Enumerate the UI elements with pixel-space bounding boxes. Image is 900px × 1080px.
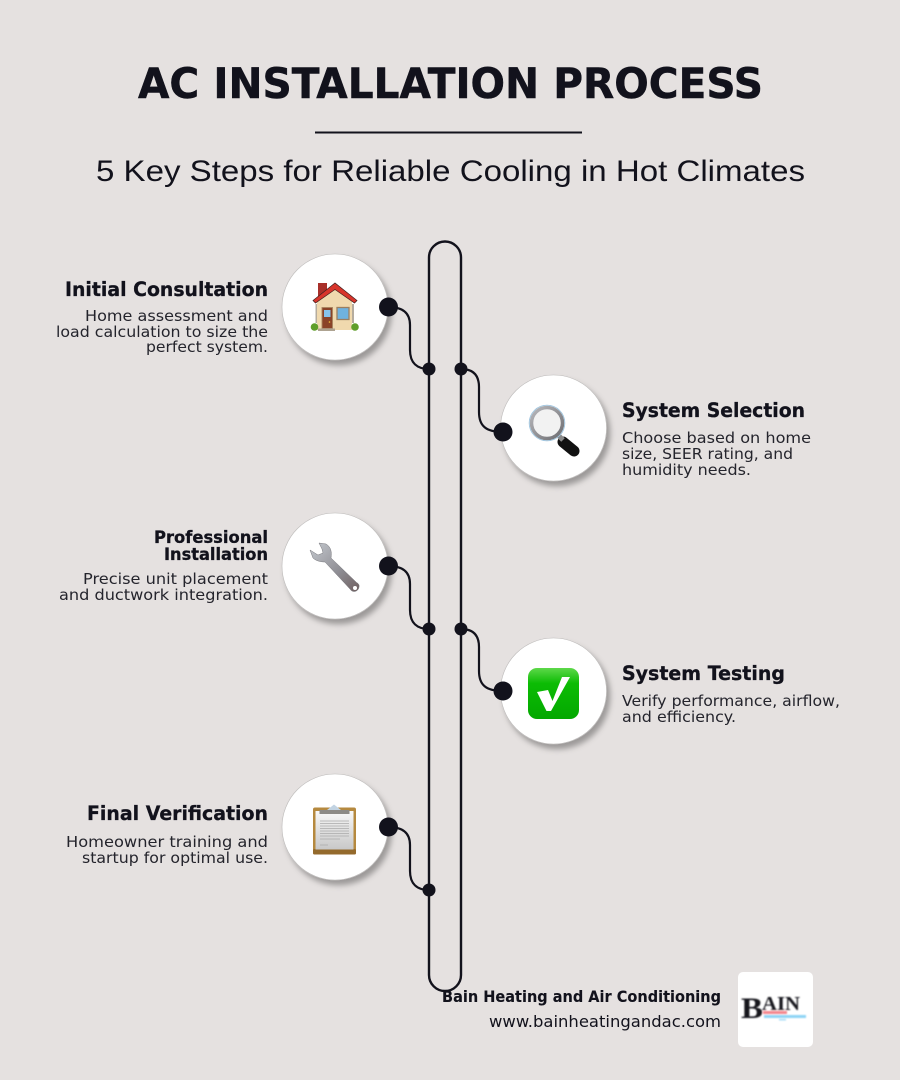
icon circle: wrench: [282, 513, 388, 619]
heading: Professional: [154, 528, 268, 548]
heading: [154, 528, 268, 565]
icon circle: check mark: [500, 638, 606, 744]
description: Verify performance, airflow,: [622, 692, 840, 710]
heading: Final Verification: [87, 802, 268, 825]
description: load calculation to size the: [56, 323, 268, 341]
description: Precise unit placement: [83, 570, 268, 588]
step 4: system testing: [454, 622, 840, 744]
description: and efficiency.: [622, 708, 736, 726]
description: size, SEER rating, and: [622, 445, 793, 463]
connector: [388, 307, 429, 369]
step 2: system selection: [454, 362, 811, 481]
icon circle: house: [282, 254, 388, 360]
title: AC INSTALLATION PROCESS: [138, 59, 763, 108]
description: [56, 307, 268, 356]
connector: [388, 566, 429, 629]
step 5: final verification: [66, 774, 436, 896]
description: [59, 570, 268, 604]
heading: System Selection: [622, 399, 805, 422]
description: perfect system.: [146, 338, 268, 356]
subtitle: 5 Key Steps for Reliable Cooling in Hot Climates: [96, 155, 805, 188]
icon circle: magnifying glass: [500, 375, 606, 481]
description: [622, 429, 811, 479]
heading: Initial Consultation: [65, 278, 268, 301]
central looped rail: [429, 242, 461, 991]
description: [66, 833, 268, 867]
company logo: AIN: [762, 993, 801, 1015]
heading: Installation: [164, 545, 268, 565]
footer company name: Bain Heating and Air Conditioning: [442, 987, 721, 1006]
description: Choose based on home: [622, 429, 811, 447]
description: Home assessment and: [85, 307, 268, 325]
heading: System Testing: [622, 662, 785, 685]
step 1: initial consultation: [56, 254, 436, 376]
company logo: B: [741, 992, 763, 1025]
step 3: professional installation: [59, 513, 436, 636]
company logo: [738, 972, 813, 1047]
icon circle: clipboard: [282, 774, 388, 880]
description: and ductwork integration.: [59, 586, 268, 604]
connector: [388, 827, 429, 890]
description: [622, 692, 840, 726]
description: humidity needs.: [622, 461, 751, 479]
footer website: www.bainheatingandac.com: [489, 1012, 721, 1031]
connector: [461, 369, 503, 432]
description: Homeowner training and: [66, 833, 268, 851]
description: startup for optimal use.: [82, 849, 268, 867]
connector: [461, 629, 503, 691]
